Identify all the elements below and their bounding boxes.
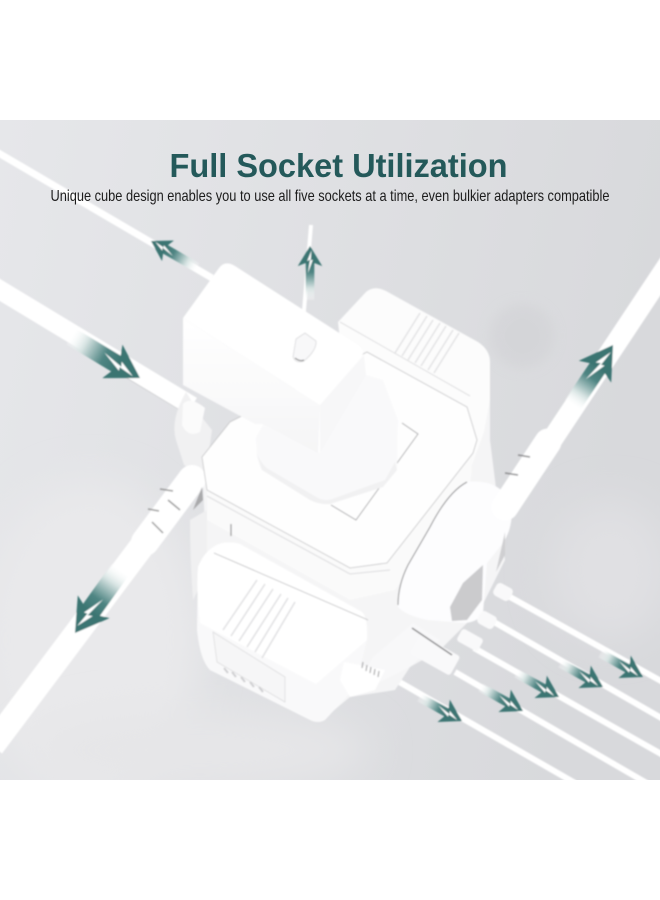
artwork [0,148,660,785]
small plug on top [293,333,316,362]
base of cube [190,512,204,596]
adapter top face [183,263,363,390]
cable: upper left thin [0,148,212,278]
arrow: lower left cable [74,570,124,634]
top adapter [183,263,398,504]
side panel [213,632,285,702]
photo background [0,120,660,800]
arrow: right cable [570,344,614,405]
infographic canvas [0,120,660,780]
adapter front side [183,318,320,453]
front left adapter [197,542,385,722]
cube top face [202,352,477,568]
arrow: upper left cable [150,240,196,268]
white silhouette behind cube [203,404,505,706]
arrow: left thick cable [74,333,140,380]
cable: right thick [547,258,660,444]
arrow: lower right 1 [600,652,644,679]
cables: five lower right [375,597,660,785]
left plug with strain relief [145,392,212,542]
arrow: lower right 3 [516,672,560,699]
arrow: lower right 2 [560,662,604,689]
adapter top face [197,542,367,684]
plug tail [505,442,548,507]
arrow: lower right 4 [480,687,524,713]
right adapter [398,442,548,623]
photo area [0,120,660,800]
cube body [202,352,477,600]
plug stem and base [384,462,398,480]
small usb plugs [410,582,514,676]
arrow: lower right 5 [419,696,462,723]
title: Full Socket Utilization [170,147,508,184]
arrow: up thin cable [298,246,322,300]
cable: lower left thick [0,542,145,746]
ribs [223,580,295,658]
plug tail [350,666,377,696]
cable: left thick [0,284,192,415]
grille [450,565,483,621]
cable: thin upward [302,225,311,335]
back adapter [338,288,490,408]
